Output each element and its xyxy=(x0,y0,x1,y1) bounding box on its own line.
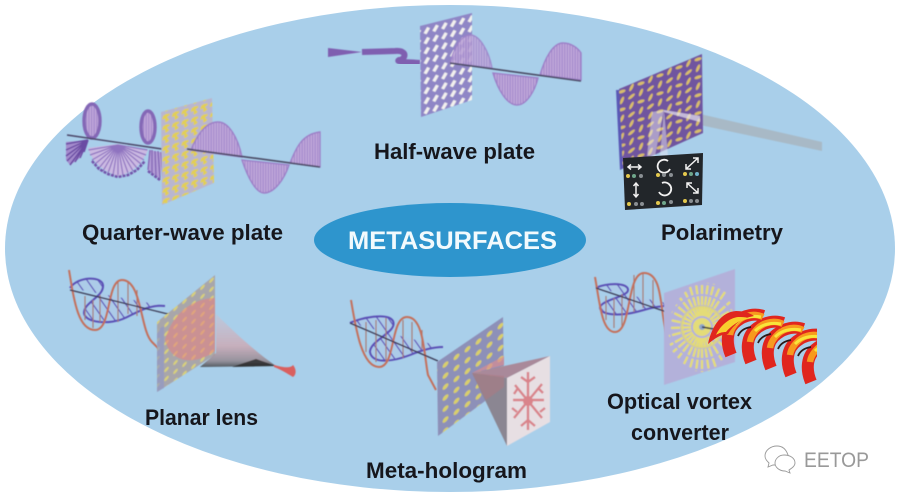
icon: reflected grey beam xyxy=(700,114,822,151)
icon: metasurface plate xyxy=(437,317,504,436)
icon: chat bubbles xyxy=(765,446,795,473)
icon: metasurface plate with bean elements xyxy=(616,54,703,170)
label: Quarter-wave plate: Quarter-wave plate xyxy=(82,220,283,245)
icon: incoming electromagnetic wave xyxy=(350,300,443,390)
icon: circularly polarised input wave xyxy=(66,104,163,180)
icon: linearly polarised output wave xyxy=(187,122,320,193)
icon: metalens plate xyxy=(157,275,215,392)
label: Optical vortex converter xyxy=(607,389,753,445)
watermark: EETOP xyxy=(765,446,869,473)
icon: vortex beam head xyxy=(708,311,754,344)
label: Optical vortex converter: converter xyxy=(631,420,729,445)
icon: red helical vortex beam xyxy=(708,308,817,384)
central badge: METASURFACES: METASURFACES xyxy=(348,227,557,255)
panel: planar lens xyxy=(69,270,296,392)
label: Planar lens: Planar lens xyxy=(145,405,258,430)
panel: optical vortex converter xyxy=(595,269,843,385)
watermark: EETOP: EETOP xyxy=(804,449,869,472)
icon: incoming electromagnetic wave xyxy=(595,273,705,345)
icon: incoming electromagnetic wave xyxy=(69,270,176,350)
central badge: METASURFACES xyxy=(314,203,586,277)
label: Meta-hologram: Meta-hologram xyxy=(366,458,527,483)
icon: metasurface plate with white elements xyxy=(420,13,472,117)
panel: meta-hologram xyxy=(350,300,550,446)
icon: input wave band xyxy=(328,48,420,63)
label: Optical vortex converter: Optical vortex xyxy=(607,389,753,414)
panel: polarimetry xyxy=(616,54,822,210)
label: Polarimetry: Polarimetry xyxy=(661,220,784,245)
panel: black polarisation states xyxy=(623,153,703,210)
icon: metasurface plate with yellow elements xyxy=(161,98,214,205)
panel: quarter-wave plate xyxy=(66,98,320,205)
icon: metasurface plate with radial elements xyxy=(664,269,735,385)
icon: projection prism with snowflake hologram xyxy=(472,356,550,446)
icon: focused light cone xyxy=(200,314,296,377)
panel: half-wave plate xyxy=(328,13,581,117)
icon: output wave xyxy=(450,35,581,105)
label: Half-wave plate: Half-wave plate xyxy=(374,139,535,164)
